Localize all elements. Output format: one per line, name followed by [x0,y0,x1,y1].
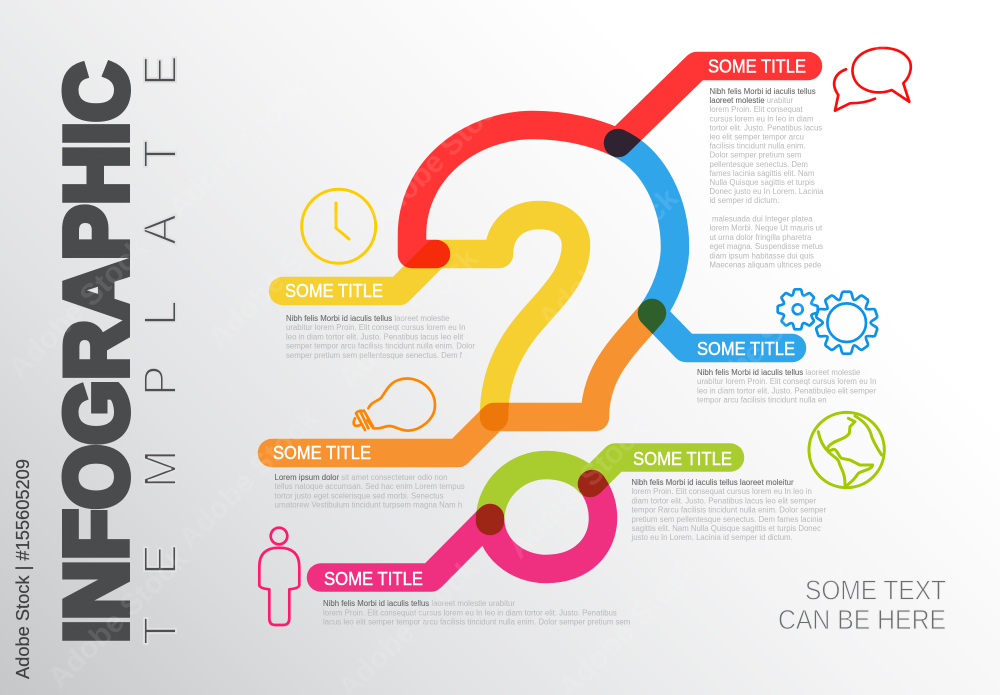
footer note: CAN BE HERE [778,604,946,635]
red body text: Maecenas aliquam ultrices pede [710,260,821,270]
green body text: Nibh felis Morbi id iaculis tellus laoreet moleitur [632,478,794,487]
stock watermark: Adobe Stock [812,452,965,605]
title: INFOGRAPHIC: INFOGRAPHIC [46,62,146,643]
red body text: laoreet molestie urabitur [710,96,793,105]
stock watermark: Adobe Stock [2,232,155,385]
yellow body text: semper tempor arcu facilisis tincidunt nulla enim. Dolor [286,342,475,351]
icon: globe [809,412,884,488]
ribbon: orange [272,313,652,453]
stock watermark: Adobe Stock [162,72,315,225]
ribbon: red [412,66,808,254]
green body text: justo eu In Lorem. Lacinia id semper id dictum. [630,533,793,542]
orange title: SOME TITLE [273,442,371,463]
red body text: Donec justo eu In Lorem. Lacinia [710,187,824,196]
icon: person [259,528,299,625]
panel: red step [708,48,911,269]
red body text: Nibh felis Morbi id iaculis tellus [710,87,816,96]
ribbon: green [490,458,730,521]
green body text: tempor Rarcu facilisis tincidunt nulla enim. Dolor semper [632,506,826,515]
stock watermark: Adobe Stock [822,92,975,245]
pink body text: lorem Proin. Elit consequat cursus lorem eu In leo in diam tortor elit. Justo. Penatibus [323,608,617,617]
blue body text: Nibh felis Morbi id iaculis tellus laoreet molestie [697,368,860,377]
green body text: sagittis elit. Nam Nulla Quisque sagittis et turpis Donec [632,524,821,533]
stock watermark: Adobe Stock [532,182,685,335]
red body text: cursus lorem eu In leo in diam [710,114,814,123]
blue body text: tempor arcu facilisis tincidunt nulla en [697,396,827,405]
panel: pink step [259,528,630,627]
red body text: leo elit semper tempor arcu [710,132,804,142]
red body text: Nulla Quisque sagittis et turpis [710,178,815,187]
red title: SOME TITLE [708,56,806,77]
red body text: lorem Morbi. Neque Ut mauris ut [710,224,823,233]
red body text: pellentesque senectus. Dem [710,160,808,169]
orange body text: tortor justo eget scelerisque sed morbi. Senectus [274,491,444,500]
panel: orange step [273,378,467,510]
numeral 2 ribbons [272,66,808,578]
pink body text: Nibh felis Morbi id iaculis tellus laoreet molestie urabitur [323,599,515,608]
panel: blue step [697,289,879,405]
green title: SOME TITLE [633,448,732,469]
ribbon: yellow [283,215,576,417]
panel: yellow step [285,189,477,360]
panel: green step [630,412,884,542]
pink body text: lacus leo elit semper tempor arcu facilisis tincidunt nulla enim. Dolor semper pretium sem [323,618,630,627]
red body text: lorem Proin. Elit consequat [710,105,804,114]
subtitle: TEMPLATE: TEMPLATE [134,55,186,645]
stock credit: Adobe Stock | #155605209 [13,459,33,679]
stock watermark: Adobe Stock [362,82,515,235]
orange body text: tellus natoque accumsan. Sed hac enim Lorem tempus [274,482,465,491]
icon: gears [778,289,878,354]
yellow body text: Nibh felis Morbi id iaculis tellus laoreet molestie [286,314,449,323]
green body text: diam tortor elit. Justo. Penatibus lacus leo elit semper [632,496,817,505]
red body text: ut urna dolor fringilla pharetra [710,233,812,242]
red body text: eget magna. Suspendisse metus [710,242,823,251]
icon: light bulb [354,378,435,431]
red body text: facilisis tincidunt nulla enim. [710,142,806,151]
stock watermark: Adobe Stock [172,402,325,555]
icon: speech bubbles [834,48,911,111]
yellow body text: semper pretium sem pellentesque senectus. Dem f [286,351,463,360]
red body text: id semper id dictum. [710,196,779,205]
footer note [778,574,946,635]
yellow body text: leo in diam tortor elit. Justo. Penatibus lacus leo elit [286,332,464,341]
green body text: lorem Proin. Elit consequat cursus lorem eu In leo in [632,487,812,496]
yellow body text: urabitur lorem Proin. Elit conseqt cursus lorem eu In [286,323,465,332]
stock watermark: Adobe Stock [682,272,835,425]
red body text: fames lacinia sagittis elit. Nam [710,169,814,178]
orange body text: urnatorew Vestibulum tincidunt turpsem magna Nam h [274,501,462,510]
stock watermark: Adobe Stock [332,242,485,395]
pink title: SOME TITLE [324,568,423,589]
blue body text: leo in diam tortor elit. Justo. Penatibuleo elit semper [697,386,876,395]
red body text: diam ipsum habitasse dui quis [710,251,814,260]
orange body text: Lorem ipsum dolor sit amet consectetuer odio non [274,473,447,482]
ribbon: blue [618,143,792,348]
large gear [815,292,878,354]
stock watermark: Adobe Stock [202,202,355,355]
blue body text: urabitur lorem Proin. Elit conseqt cursus lorem eu In [697,377,876,386]
red body text: Dolor semper pretium sem [710,151,801,160]
blue title: SOME TITLE [697,338,795,359]
ribbon: pink [321,484,603,578]
footer note: SOME TEXT [805,574,946,606]
stock watermark: Adobe Stock [502,412,655,565]
small gear [778,289,818,329]
icon: clock [302,189,376,263]
stock watermark: Adobe Stock [42,542,195,695]
red body text: tortor elit. Justo. Penatibus lacus [710,123,822,132]
heading: infographic title [46,55,186,645]
red body text: malesuada dui Integer platea [712,214,813,224]
green body text: pretium sem pellentesque senectus. Dem fames lacinia [632,515,823,524]
yellow title: SOME TITLE [285,280,383,301]
